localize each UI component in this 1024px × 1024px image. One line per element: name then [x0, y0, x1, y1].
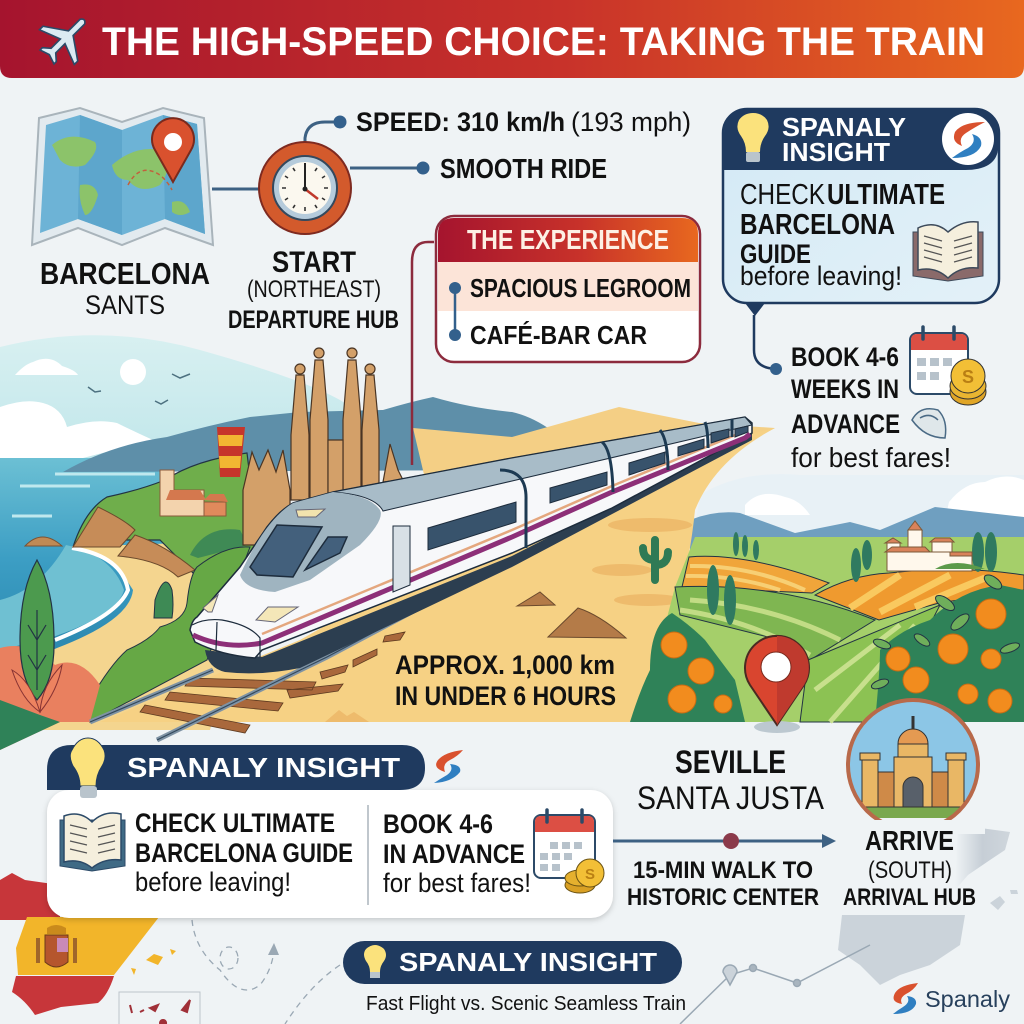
route line with pin	[680, 945, 870, 1024]
right clouds	[745, 476, 1024, 520]
spanaly logo	[893, 983, 1011, 1014]
start label: (NORTHEAST)	[247, 276, 381, 303]
icon: calendar with coins	[910, 327, 986, 405]
icon: bulb	[70, 738, 105, 798]
door	[393, 526, 410, 592]
seville label: SANTA JUSTA	[637, 780, 825, 816]
cypress trees	[707, 532, 997, 625]
title: THE HIGH-SPEED CHOICE: TAKING THE TRAIN	[102, 20, 985, 64]
walk label	[627, 857, 819, 911]
orange bushes	[630, 572, 1024, 722]
heading: SPANALY INSIGHT	[399, 947, 657, 977]
nose cap shading	[240, 492, 381, 592]
start label: START	[272, 246, 356, 279]
booking tip text	[791, 342, 951, 473]
heading: INSIGHT	[782, 137, 890, 167]
speed label: (193 mph)	[571, 107, 691, 137]
icon: book	[913, 222, 983, 281]
guide text: CHECK ULTIMATE	[135, 808, 335, 838]
icon: airplane	[30, 2, 102, 74]
connector: insight to booking	[745, 303, 782, 375]
walk label: HISTORIC CENTER	[627, 884, 819, 911]
desert ground	[100, 428, 775, 722]
walk label: 15-MIN WALK TO	[633, 857, 813, 884]
icon: folded map with pin	[32, 108, 213, 245]
connector: speed	[305, 122, 340, 142]
smooth ride label: SMOOTH RIDE	[440, 153, 607, 184]
body text: GUIDE	[740, 239, 811, 269]
sagrada familia	[243, 348, 403, 545]
spain flag map	[0, 873, 176, 1015]
village	[885, 521, 985, 571]
speed label	[356, 107, 691, 137]
roof	[333, 417, 752, 511]
heading: SPANALY	[782, 112, 906, 142]
railway track	[90, 565, 500, 740]
logo badge	[942, 113, 994, 165]
panel: spanaly insight bottom card	[47, 738, 613, 918]
right mountains	[690, 507, 1024, 570]
passenger windows	[428, 426, 748, 550]
spacious legroom: SPACIOUS LEGROOM	[470, 273, 691, 303]
body text: ULTIMATE	[827, 179, 945, 211]
desert patches	[325, 518, 692, 722]
spanaly logo: Spanaly	[925, 986, 1011, 1012]
seville label: SEVILLE	[675, 744, 786, 780]
headland with cliffs and church	[73, 453, 260, 577]
icon: bulb	[364, 945, 386, 978]
label: Barcelona Sants: BARCELONA	[40, 256, 210, 291]
canary islands inset	[119, 992, 200, 1024]
seville label	[637, 744, 825, 816]
wave highlights	[12, 474, 155, 516]
windshield and side window	[250, 525, 322, 577]
start label	[228, 246, 399, 334]
start label: DEPARTURE HUB	[228, 306, 399, 334]
arrive label: ARRIVE	[865, 825, 954, 856]
body text	[740, 179, 945, 291]
booking tip text: BOOK 4-6	[791, 342, 899, 372]
connector dot: speed	[334, 116, 346, 128]
panel: spanaly insight top right	[723, 109, 999, 303]
guide text: BARCELONA GUIDE	[135, 838, 353, 868]
nose line	[192, 620, 260, 657]
coat of arms	[38, 925, 75, 967]
sky and sun	[0, 335, 450, 470]
cypress and bay trees	[154, 582, 173, 618]
distance label: APPROX. 1,000 km	[395, 650, 615, 680]
icon: swirl	[912, 409, 946, 438]
title banner	[0, 0, 1024, 78]
booking tip text: ADVANCE	[791, 409, 900, 439]
heading	[782, 112, 906, 167]
distance label: IN UNDER 6 HOURS	[395, 681, 616, 711]
body text: BARCELONA	[740, 209, 895, 241]
arrive label: (SOUTH)	[868, 857, 952, 884]
iberia grey map	[838, 825, 1018, 985]
dashed route arrowhead	[268, 943, 279, 955]
guide text: before leaving!	[135, 867, 291, 897]
body text: before leaving!	[740, 261, 902, 291]
icon: clock	[259, 142, 351, 234]
booking text: BOOK 4-6	[383, 809, 493, 839]
icon: bulb	[737, 113, 769, 162]
bottom spanaly insight pill	[343, 941, 682, 984]
connector: map to clock	[212, 188, 262, 190]
connector: smooth ride	[350, 166, 423, 170]
headlights	[256, 607, 298, 622]
stripes	[193, 434, 750, 645]
bullet train	[190, 417, 752, 673]
dashed route decoration	[192, 920, 340, 1024]
distance label	[395, 650, 616, 711]
logo mark beside pill	[434, 750, 463, 783]
icon: large map pin	[745, 636, 809, 733]
bottom left hill and foliage	[0, 547, 250, 750]
fields	[640, 537, 1024, 722]
balearic islands	[131, 949, 176, 975]
sea	[0, 458, 170, 660]
route arrow to seville	[613, 833, 836, 849]
icon: calendar with coins	[534, 810, 604, 893]
booking text: for best fares!	[383, 868, 531, 898]
connector: experience to train	[412, 242, 434, 465]
bay shallows	[0, 545, 124, 650]
heading: THE EXPERIENCE	[467, 224, 669, 255]
right sky	[690, 474, 1024, 560]
timeline dots	[449, 282, 461, 341]
arrive label: ARRIVAL HUB	[843, 884, 976, 911]
booking text	[383, 809, 531, 898]
desert rocks	[517, 592, 626, 638]
train body	[190, 417, 752, 658]
upper sand dunes	[413, 407, 775, 500]
label: Barcelona Sants	[40, 256, 210, 320]
comparison caption: Fast Flight vs. Scenic Seamless Train	[366, 993, 686, 1015]
beach	[0, 540, 260, 730]
body text: CHECK	[740, 179, 826, 211]
panel: the experience	[436, 216, 700, 362]
guide text	[135, 808, 353, 897]
booking tip text: WEEKS IN	[791, 374, 899, 404]
divider	[367, 805, 369, 905]
cactus	[643, 540, 668, 580]
landscape scene	[0, 335, 1024, 750]
label: Barcelona Sants: SANTS	[85, 290, 165, 320]
cafe-bar car: CAFÉ-BAR CAR	[470, 320, 647, 350]
icon: calendar with coins: S	[585, 866, 595, 883]
heading: SPANALY INSIGHT	[127, 752, 400, 783]
connector dot: smooth ride	[416, 162, 430, 174]
distant mountains	[63, 397, 548, 472]
icon: book	[60, 813, 125, 871]
speed label: SPEED: 310 km/h	[356, 107, 565, 137]
icon: seville cathedral badge	[845, 700, 985, 834]
arrive label	[843, 825, 976, 911]
flag	[217, 427, 245, 477]
booking text: IN ADVANCE	[383, 839, 525, 869]
carriage joints	[500, 419, 732, 548]
undercarriage	[205, 433, 752, 673]
icon: calendar with coins: S	[962, 367, 974, 387]
booking tip text: for best fares!	[791, 442, 951, 473]
